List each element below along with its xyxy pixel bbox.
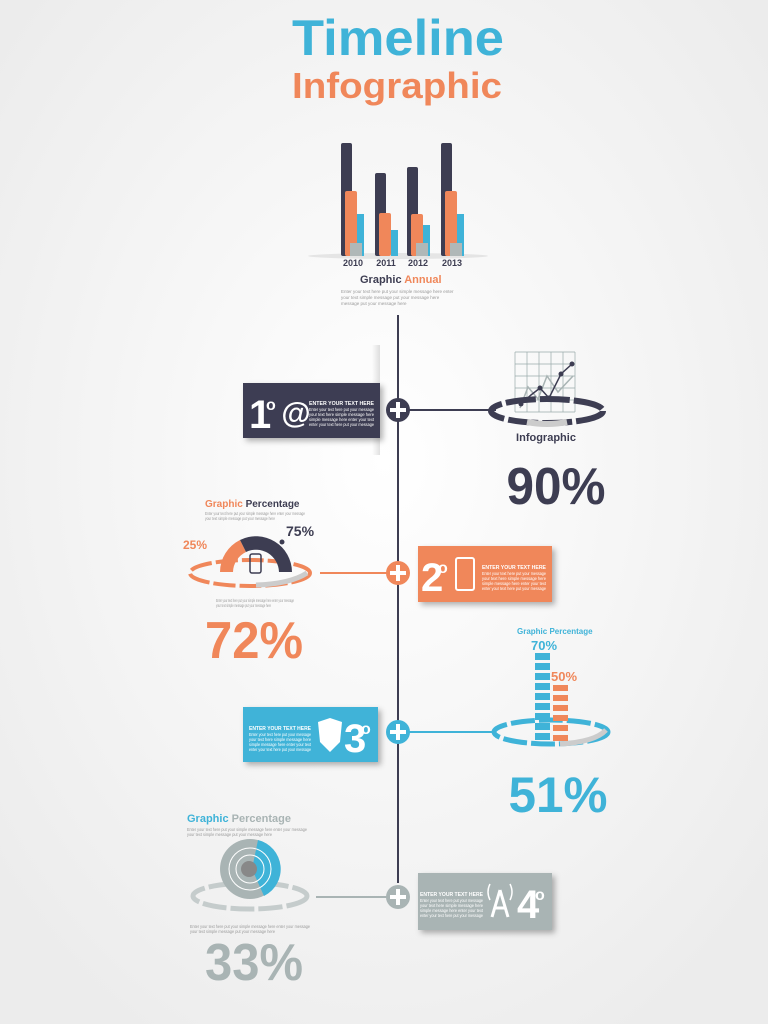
- box 2: your text here simple message here: [482, 576, 546, 581]
- box 1: 1: [249, 393, 271, 437]
- box 3: [243, 707, 378, 762]
- box 1: @: [281, 397, 311, 430]
- timeline axis: [397, 315, 399, 883]
- step 2: [183, 499, 552, 670]
- title: Infographic: [292, 65, 502, 106]
- step 3: [243, 627, 608, 823]
- box 1: [243, 383, 380, 438]
- target chart: your text simple message put your message here: [190, 929, 275, 934]
- half donut chart: Enter your text here put your simple message here enter your message: [205, 511, 305, 516]
- box 3: your text here simple message here: [249, 737, 311, 742]
- half donut chart: your text simple message put your message here: [216, 603, 271, 608]
- box 3: o: [361, 721, 371, 738]
- stacked bar chart: 70%: [531, 638, 557, 653]
- step 1: [243, 345, 606, 516]
- box 2: Enter your text here put your message: [482, 571, 546, 576]
- line chart: [491, 352, 603, 424]
- bar chart: annual: [308, 143, 488, 306]
- step 4: 33%: [205, 934, 303, 992]
- step 1: 90%: [506, 458, 606, 516]
- stacked bar chart: Graphic Percentage: [517, 627, 593, 636]
- box 4: Enter your text here put your message: [420, 898, 483, 903]
- stacked bar chart: 50%: [551, 669, 577, 684]
- step 3: 51%: [508, 767, 608, 823]
- half donut chart: 75%: [286, 523, 315, 539]
- box 4: ENTER YOUR TEXT HERE: [420, 892, 483, 898]
- half donut chart: [183, 499, 315, 608]
- box 1: enter your text here put your message: [309, 422, 374, 427]
- box 1: ENTER YOUR TEXT HERE: [309, 401, 374, 407]
- box 3: simple message here enter your text: [249, 742, 312, 747]
- target chart: [187, 813, 310, 934]
- title: Timeline: [292, 10, 504, 66]
- half donut chart: your text simple message put your message here: [205, 516, 275, 521]
- box 4: enter your text here put your message: [420, 913, 483, 918]
- bar chart: annual: your text simple message put your message here: [341, 295, 440, 300]
- title: [292, 10, 504, 106]
- box 1: your text here simple message here: [309, 412, 374, 417]
- step 1: Infographic: [516, 432, 576, 444]
- step 4: [187, 813, 552, 992]
- plus icon 3: [386, 720, 410, 744]
- box 2: 2: [421, 556, 443, 600]
- plus icon 4: [386, 885, 410, 909]
- box 2: simple message here enter your text: [482, 581, 547, 586]
- bar chart: annual: 2011: [376, 258, 396, 268]
- target chart: Enter your text here put your simple message here enter your message: [187, 827, 307, 832]
- target chart: Graphic Percentage: [187, 813, 291, 825]
- box 3: enter your text here put your message: [249, 747, 311, 752]
- box 1: simple message here enter your text: [309, 417, 375, 422]
- box 4: o: [535, 887, 545, 904]
- box 1: o: [266, 397, 276, 414]
- bar chart: annual: Graphic Annual: [360, 274, 442, 286]
- box 4: your text here simple message here: [420, 903, 483, 908]
- box 2: o: [438, 560, 448, 577]
- bar chart: annual: 2012: [408, 258, 428, 268]
- plus icon 1: [386, 398, 410, 422]
- bar chart: annual: message put your message here: [341, 301, 407, 306]
- box 3: ENTER YOUR TEXT HERE: [249, 726, 311, 732]
- plus icon 2: [386, 561, 410, 585]
- bar chart: annual: 2013: [442, 258, 462, 268]
- half donut chart: Enter your text here put your simple message here enter your message: [216, 598, 294, 603]
- box 4: [418, 873, 552, 930]
- step 2: 72%: [205, 612, 303, 670]
- box 4: simple message here enter your text: [420, 908, 484, 913]
- box 3: 3: [344, 717, 366, 761]
- box 1: Enter your text here put your message: [309, 407, 374, 412]
- stacked bar chart: [494, 627, 608, 744]
- box 2: enter your text here put your message: [482, 586, 546, 591]
- bar chart: annual: 2010: [343, 258, 363, 268]
- box 3: Enter your text here put your message: [249, 732, 311, 737]
- box 4: 4: [517, 883, 540, 927]
- box 2: ENTER YOUR TEXT HERE: [482, 565, 546, 571]
- box 2: [418, 546, 552, 602]
- bar chart: annual: Enter your text here put your simple message here enter: [341, 289, 454, 294]
- target chart: Enter your text here put your simple message here enter your message: [190, 924, 310, 929]
- half donut chart: 25%: [183, 538, 207, 552]
- target chart: your text simple message put your message here: [187, 832, 272, 837]
- half donut chart: Graphic Percentage: [205, 499, 300, 510]
